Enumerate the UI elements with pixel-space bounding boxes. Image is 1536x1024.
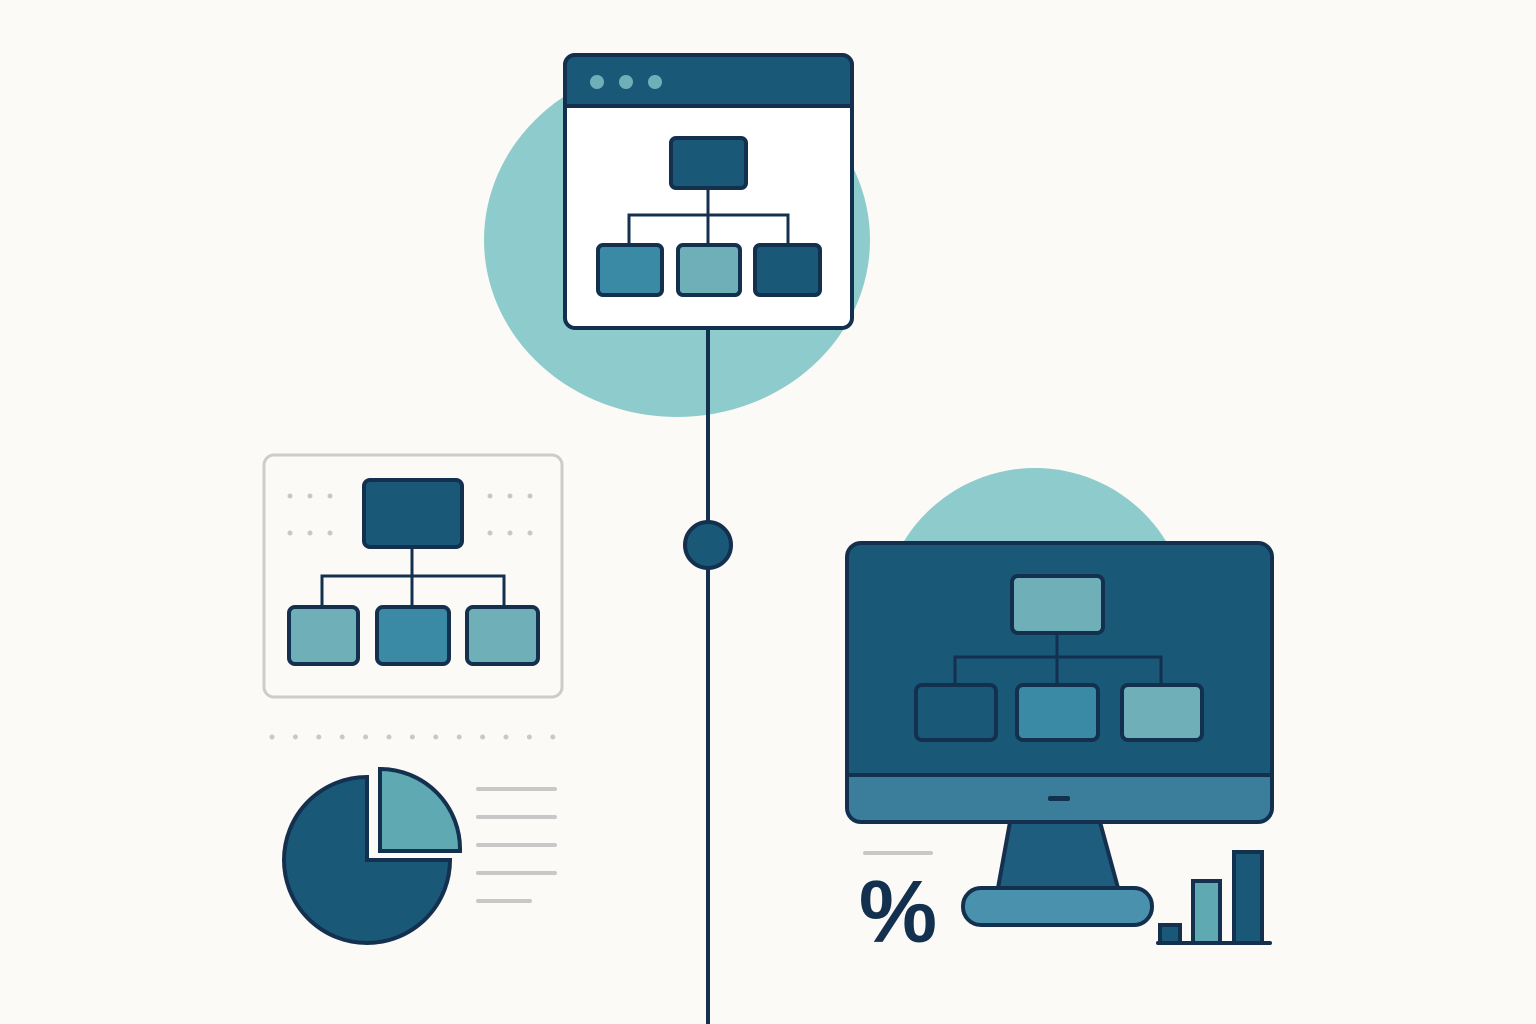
left panel: org chart card (264, 455, 562, 697)
legend lines (478, 789, 555, 901)
pie chart (284, 769, 460, 943)
icon: percent: % (859, 862, 937, 961)
background circle: right (881, 468, 1189, 776)
gray line above percent (865, 851, 931, 855)
background circle: top (484, 63, 870, 417)
dotted divider (272, 734, 556, 740)
browser window with org chart (565, 55, 852, 328)
timeline line (706, 328, 710, 1024)
monitor (847, 543, 1272, 925)
bar chart (1158, 852, 1270, 943)
timeline node (685, 522, 731, 568)
